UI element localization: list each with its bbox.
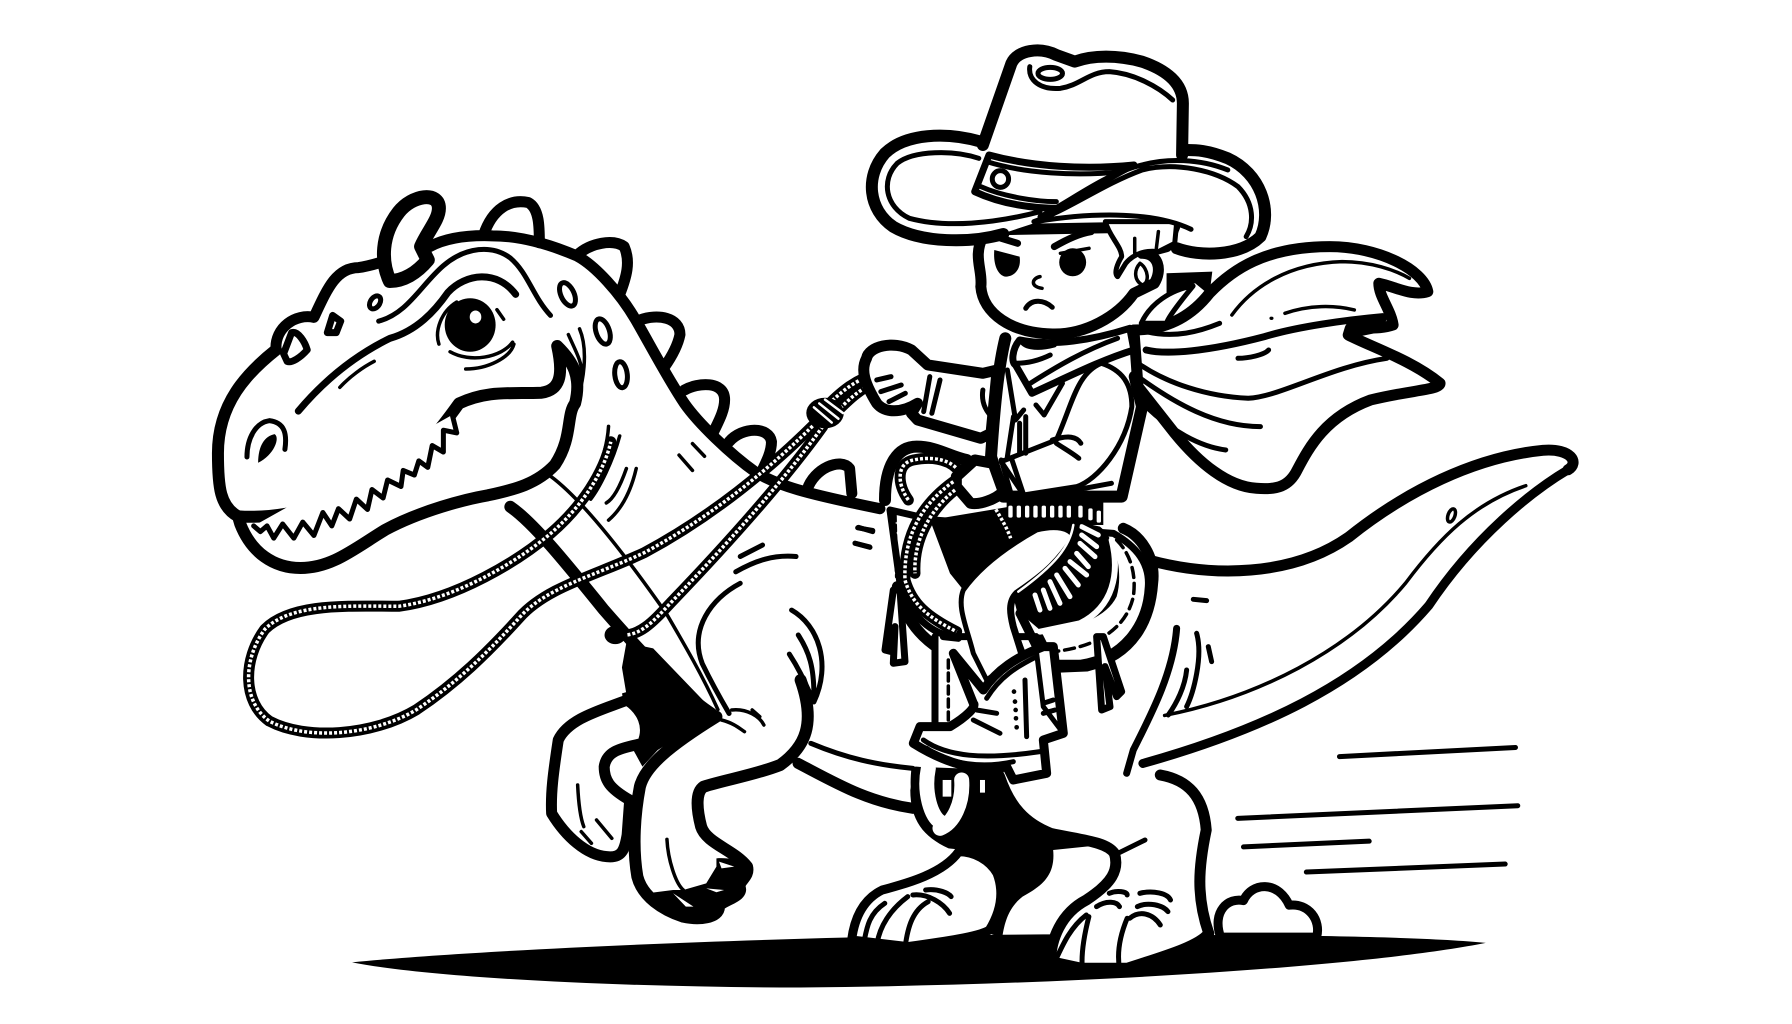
eyes <box>994 250 1020 277</box>
back and neck outline <box>430 236 880 509</box>
chaps lower leg <box>935 637 977 727</box>
nostril <box>247 421 286 463</box>
hind and belly <box>551 680 1209 968</box>
skin spots <box>367 281 629 388</box>
scarf knot <box>1141 272 1212 323</box>
black chest shadow <box>622 643 716 744</box>
back outline behind saddle <box>897 528 1153 667</box>
ground shadow <box>352 934 1486 987</box>
dinosaur neck, head and front body <box>218 197 880 744</box>
cowboy hat <box>872 50 1265 254</box>
eyebrows <box>1001 232 1091 247</box>
chaps fringe <box>1035 527 1098 610</box>
speed lines <box>1238 747 1518 872</box>
lasso rope <box>249 373 880 733</box>
far hind foot <box>852 852 1001 947</box>
body dashes <box>855 527 1207 601</box>
belly lines <box>798 743 913 808</box>
black far-side shadow <box>910 767 1102 938</box>
nose and mouth <box>1033 277 1042 288</box>
neck front lines <box>510 507 711 713</box>
saddle, leg and boot <box>855 447 1212 840</box>
near hind leg <box>1000 775 1209 968</box>
saddle straps <box>885 590 1122 710</box>
lower hand holding coil <box>956 460 1003 504</box>
nose horns <box>284 315 341 362</box>
stirrup rings <box>911 767 1012 840</box>
main horn <box>384 197 439 281</box>
flowing scarf <box>1134 247 1440 489</box>
neck kerchief <box>1013 328 1134 393</box>
chaps seam <box>1011 523 1077 653</box>
bandana, rider torso and head <box>864 50 1440 504</box>
teeth <box>254 415 457 538</box>
head top <box>276 260 390 350</box>
coiled rope <box>885 447 1011 632</box>
rider face <box>978 222 1177 334</box>
belt with bullets <box>1007 497 1103 525</box>
brow and face lines <box>298 249 705 520</box>
saddle blanket <box>890 510 1148 663</box>
hair <box>1105 222 1177 277</box>
skull outline <box>218 346 577 568</box>
dinosaur eye <box>445 298 496 352</box>
rider torso <box>982 338 1142 497</box>
thigh <box>961 528 1073 680</box>
dust cloud <box>1218 887 1318 937</box>
neck spikes <box>484 202 852 493</box>
shoulder lines <box>698 545 822 713</box>
rider pointing arm and hand <box>864 345 997 438</box>
dinosaur tail <box>1143 450 1573 763</box>
cowboy boot <box>913 647 1063 780</box>
far front leg <box>551 700 645 857</box>
near front leg <box>635 680 808 919</box>
black shadow between front legs <box>622 680 716 767</box>
saddle seat <box>930 507 1119 630</box>
thigh lines of dinosaur <box>1127 628 1212 773</box>
